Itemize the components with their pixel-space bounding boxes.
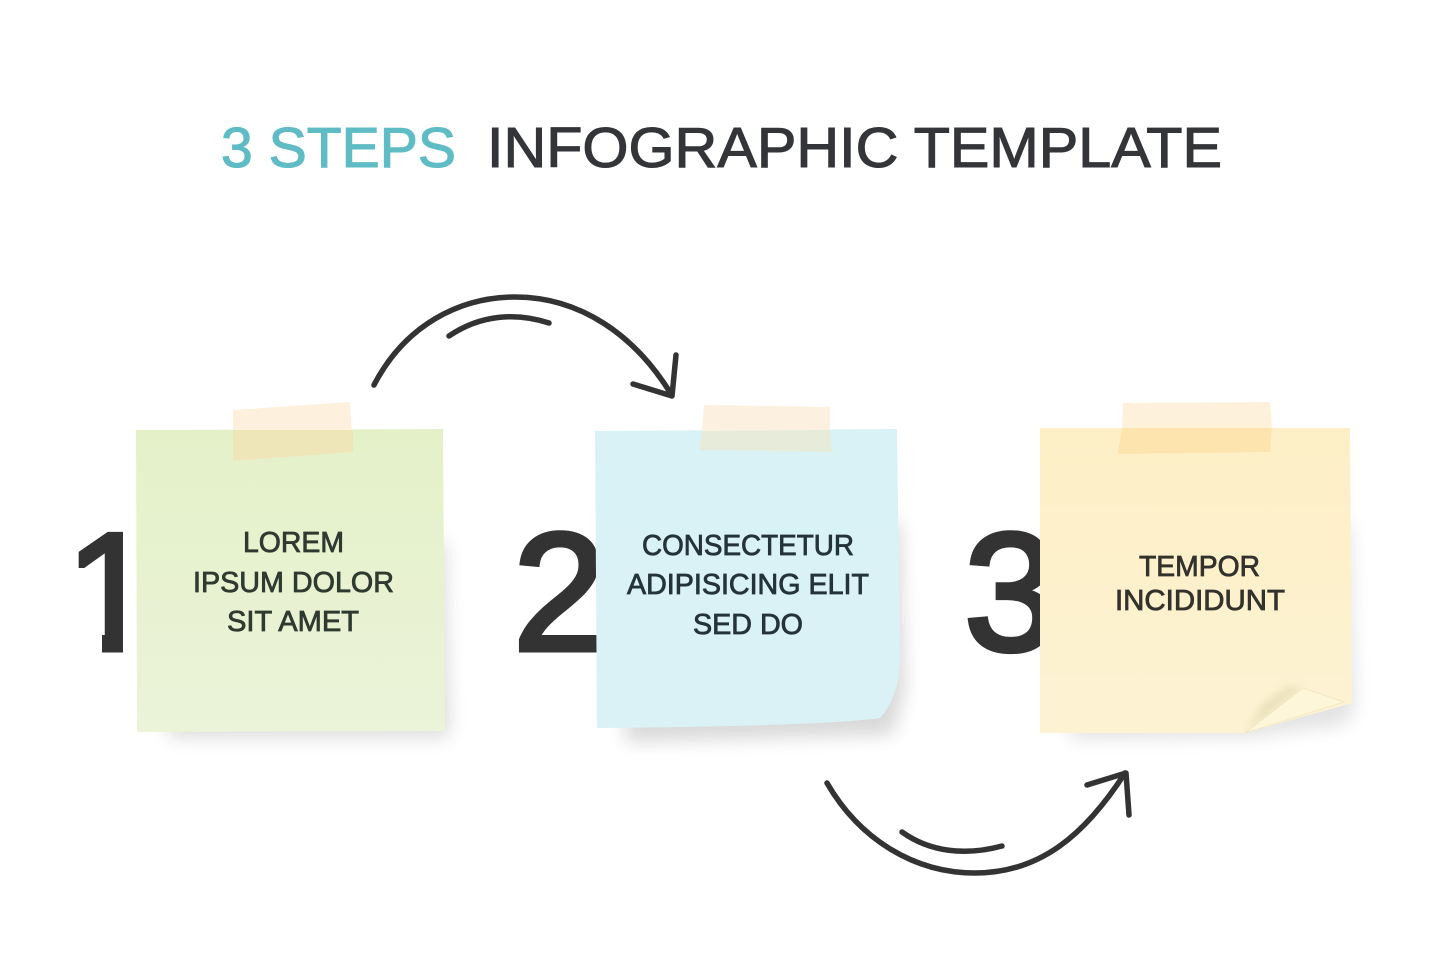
fold: [1245, 688, 1344, 733]
panel: step 2: [513, 405, 905, 742]
number 2: 2: [513, 498, 606, 686]
panel: step 3: [964, 402, 1355, 739]
note text: IPSUM DOLOR: [193, 567, 394, 599]
title: [221, 116, 1222, 180]
tape: [699, 405, 832, 452]
tape: [233, 402, 353, 461]
title accent: 3 STEPS: 3 STEPS: [221, 116, 456, 180]
note text: TEMPOR: [1139, 551, 1260, 583]
arrow: step 1 to step 2: [374, 297, 676, 396]
panel: step 1: [65, 402, 450, 738]
note text: INCIDIDUNT: [1115, 585, 1285, 617]
tape: [1118, 402, 1272, 454]
fold shadow: [1245, 686, 1303, 733]
note text: [1115, 551, 1285, 617]
title main: INFOGRAPHIC TEMPLATE: INFOGRAPHIC TEMPLATE: [487, 116, 1222, 180]
note text: [193, 527, 394, 638]
arrow: step 2 to step 3: [827, 773, 1129, 873]
infographic canvas: [78, 126, 1359, 876]
note: blue with curled corner: [595, 429, 900, 728]
number 3: 3: [964, 498, 1057, 686]
number 1: 1: [65, 498, 158, 686]
note text: CONSECTETUR: [642, 530, 854, 562]
note text: SED DO: [693, 609, 803, 641]
note text: [627, 530, 869, 641]
note text: ADIPISICING ELIT: [627, 569, 869, 601]
note: yellow with folded corner: [1040, 428, 1352, 733]
note text: SIT AMET: [227, 606, 359, 638]
note text: LOREM: [243, 527, 344, 559]
note: green: [136, 429, 445, 732]
